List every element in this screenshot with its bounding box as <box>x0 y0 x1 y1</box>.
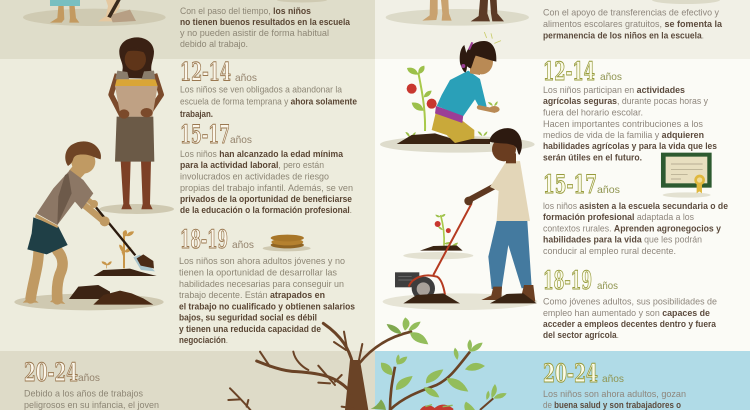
text block: 15-17 left: para la actividad laboral, pero están <box>180 160 324 171</box>
text block: age 9-11 right: Con el apoyo de transferencias de efectivo y <box>543 8 719 18</box>
text block: 12-14 right: serán útiles en el futuro. <box>543 152 642 164</box>
text block: age 9-11 left <box>180 6 351 50</box>
text block: 12-14 right: habilidades agrícolas y para la vida que les <box>543 141 717 152</box>
heading: 12-14 left: años <box>235 72 257 84</box>
illustration: ellipse top of left text <box>277 0 327 2</box>
text block: 12-14 right: agrícolas seguras, durante pocas horas y <box>543 96 708 107</box>
text block: 20-24 left: Debido a los años de trabajos <box>24 388 143 400</box>
text block: age 9-11 left: y no pueden asistir de forma habitual <box>180 28 329 39</box>
text block: 15-17 right <box>543 201 728 257</box>
heading: 15-17 right: años <box>597 184 620 196</box>
heading: 20-24 left: 20-24 <box>24 358 78 387</box>
illustration: legs of children at top left <box>23 0 166 26</box>
text block: age 9-11 right: permanencia de los niños en la escuela. <box>543 30 704 42</box>
text block: 15-17 right: los niños asisten a la escuela secundaria o de <box>543 201 728 212</box>
text block: 18-19 right: del sector agrícola. <box>543 330 619 341</box>
text block: 18-19 left: y tienen una reducida capacidad de <box>179 324 321 335</box>
text block: 18-19 left <box>179 256 355 346</box>
heading: 20-24 left: años <box>78 372 100 384</box>
text block: 12-14 left: escuela de forma temprana y ahora solamente <box>180 96 357 108</box>
text block: 20-24 right: Los niños son ahora adultos, gozan <box>543 389 686 400</box>
text block: 20-24 left <box>24 388 159 410</box>
illustration: girl carrying basket <box>99 37 174 214</box>
text block: 12-14 right <box>543 85 717 164</box>
icon: coins <box>263 235 311 251</box>
text block: 18-19 left: tienen la oportunidad de desarrollar las <box>179 268 337 278</box>
text block: 18-19 left: Los niños son ahora adultos jóvenes y no <box>179 256 345 267</box>
illustration: bare tree on the left side <box>228 323 411 410</box>
heading: 18-19 right: años <box>597 280 618 292</box>
text block: 15-17 left: privados de la oportunidad de beneficiarse <box>180 194 352 205</box>
illustration: leafy tree branches <box>371 317 507 410</box>
illustration: legs of children at top right <box>386 0 529 26</box>
text block: 18-19 left: bajos, su seguridad social es débil <box>179 312 317 324</box>
text block: 12-14 right: medios de vida de la familia y adquieren <box>543 130 704 141</box>
icon: diploma <box>661 153 712 198</box>
text block: 18-19 left: negociación. <box>179 335 228 346</box>
panel: left column bands <box>0 0 375 410</box>
text block: age 9-11 left: debido al trabajo. <box>180 39 248 50</box>
heading: 18-19 left: años <box>232 239 254 251</box>
text block: 12-14 right: fuera del horario escolar. <box>543 108 643 118</box>
heading: 20-24 right: 20-24 <box>543 359 598 388</box>
text block: 12-14 left <box>180 84 357 120</box>
text block: 15-17 left: involucrados en actividades de riesgo <box>180 172 329 182</box>
text block: 12-14 right: Hacen importantes contribuciones a los <box>543 119 703 130</box>
heading: 15-17 left: 15-17 <box>180 120 230 149</box>
text block: 15-17 left: Los niños han alcanzado la edad mínima <box>180 149 344 160</box>
text block: 12-14 left: Los niños se ven obligados a abandonar la <box>180 84 343 96</box>
text block: age 9-11 right <box>543 8 723 42</box>
text block: 15-17 left <box>180 149 353 216</box>
heading: 20-24 right: años <box>602 373 624 385</box>
illustration: boy with wheel hoe and tomato plant <box>383 128 537 310</box>
heading: 12-14 right: 12-14 <box>543 57 595 86</box>
illustration: girl tending plants <box>380 32 535 153</box>
text block: 12-14 left: trabajan. <box>180 109 213 120</box>
illustration: boy digging with shovel <box>14 141 164 310</box>
heading: 15-17 left: años <box>230 134 252 146</box>
text block: 18-19 left: habilidades necesarias para conseguir un <box>179 279 344 290</box>
text block: 12-14 right: Los niños participan en actividades <box>543 85 685 96</box>
text block: 15-17 left: propias del trabajo infantil. Además, se ven <box>180 183 353 194</box>
text block: age 9-11 left: Con el paso del tiempo, los niños <box>180 6 311 17</box>
text block: 18-19 right <box>543 296 717 341</box>
text block: age 9-11 left: no tienen buenos resultados en la escuela <box>180 17 351 28</box>
text block: 15-17 right: conducir al empleo rural decente. <box>543 246 676 257</box>
text block: 18-19 left: el trabajo no cualificado y obtienen salarios <box>179 302 355 312</box>
text block: 15-17 right: habilidades para la vida que les podrán <box>543 234 702 246</box>
text block: 18-19 left: trabajo decente. Están atrapados en <box>179 290 325 301</box>
heading: 18-19 right: 18-19 <box>543 266 592 295</box>
text block: 15-17 right: contextos rurales. Aprenden agronegocios y <box>543 224 722 234</box>
text block: 15-17 left: de la educación o la formación profesional. <box>180 205 352 216</box>
text block: age 9-11 right: alimentos escolares gratuitos, se fomenta la <box>543 19 723 30</box>
text block: 18-19 right: acceder a empleos decentes dentro y fuera <box>543 319 717 330</box>
text block: 18-19 right: Como jóvenes adultos, sus posibilidades de <box>543 296 717 308</box>
text block: 15-17 right: formación profesional adaptada a los <box>543 212 694 223</box>
heading: 12-14 left: 12-14 <box>180 58 231 86</box>
panel: right column bands <box>375 0 750 410</box>
illustration: ellipse top of right text <box>652 0 720 4</box>
text block: 18-19 right: empleo han aumentado y son capaces de <box>543 308 710 319</box>
text block: 20-24 right <box>543 389 686 410</box>
heading: 18-19 left: 18-19 <box>180 225 228 254</box>
heading: 15-17 right: 15-17 <box>543 170 597 199</box>
heading: 12-14 right: años <box>600 71 622 83</box>
